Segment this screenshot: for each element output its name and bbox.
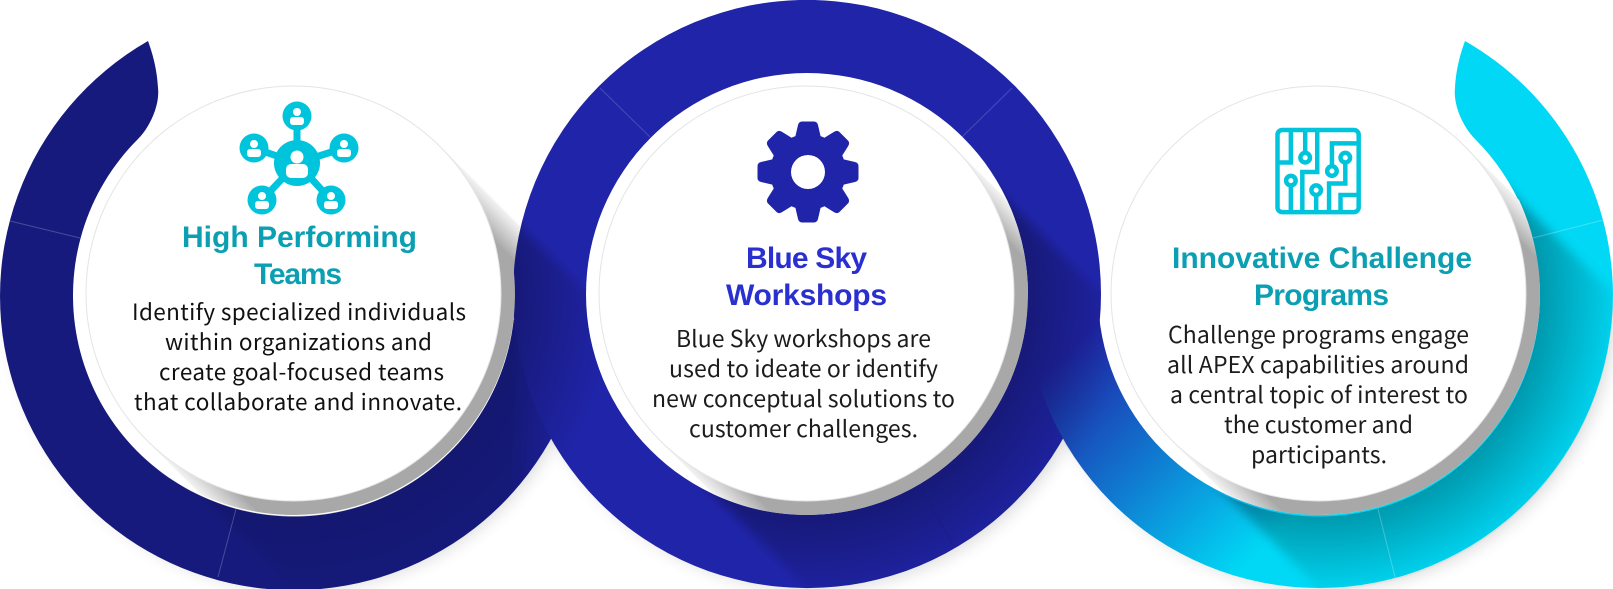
- shadow cast by left disc on middle ring: [514, 222, 592, 446]
- panel: Blue Sky Workshops: [599, 86, 1028, 515]
- long shadow wedge of left disc: [400, 147, 535, 320]
- heading: Innovative Challenge Programs: Innovative Challenge: [1172, 242, 1472, 275]
- heading: Blue Sky Workshops: [726, 242, 887, 312]
- text: workshops description: customer challenges.: [689, 410, 918, 444]
- icon: gear: [758, 122, 858, 222]
- text: challenge description: [1167, 316, 1469, 470]
- icon: team network: [240, 102, 358, 214]
- ring: middle blue circle: [513, 0, 1101, 588]
- ring: left dark navy arc: [0, 41, 551, 589]
- text: challenge description: a central topic of interest to: [1170, 376, 1468, 410]
- text: team description: within organizations and: [165, 325, 432, 357]
- heading: Innovative Challenge Programs: [1172, 242, 1472, 312]
- icon: circuit board: [1278, 130, 1359, 212]
- heading: High Performing Teams: [182, 221, 417, 291]
- text: challenge description: participants.: [1251, 436, 1387, 470]
- text: challenge description: Challenge programs engage: [1168, 316, 1469, 350]
- heading: High Performing Teams: High Performing: [182, 221, 417, 254]
- heading: Innovative Challenge Programs: Programs: [1254, 279, 1389, 312]
- text: team description: create goal-focused teams: [159, 355, 444, 387]
- panel: High Performing Teams: [86, 86, 515, 515]
- heading: Blue Sky Workshops: Blue Sky: [746, 242, 867, 275]
- text: workshops description: new conceptual solutions to: [652, 380, 955, 414]
- heading: High Performing Teams: Teams: [254, 258, 342, 291]
- shadow cast by middle disc on rings: [700, 187, 1105, 588]
- text: workshops description: Blue Sky workshops are: [676, 320, 931, 354]
- text: workshops description: used to ideate or identify: [669, 350, 938, 384]
- text: team description: that collaborate and innovate.: [134, 385, 462, 417]
- shadow cast by right disc on right ring: [1212, 180, 1612, 587]
- text: workshops description: [652, 320, 955, 444]
- text: team description: Identify specialized individuals: [132, 295, 466, 327]
- text: challenge description: the customer and: [1224, 406, 1413, 440]
- heading: Blue Sky Workshops: Workshops: [726, 279, 887, 312]
- text: challenge description: all APEX capabilities around: [1167, 346, 1469, 380]
- panel: Innovative Challenge Programs: [1111, 86, 1540, 515]
- text: team description: [132, 295, 466, 417]
- seam lines on right ring and middle ring: [1378, 220, 1603, 577]
- ring: right blue-to-cyan arc: [1025, 41, 1613, 588]
